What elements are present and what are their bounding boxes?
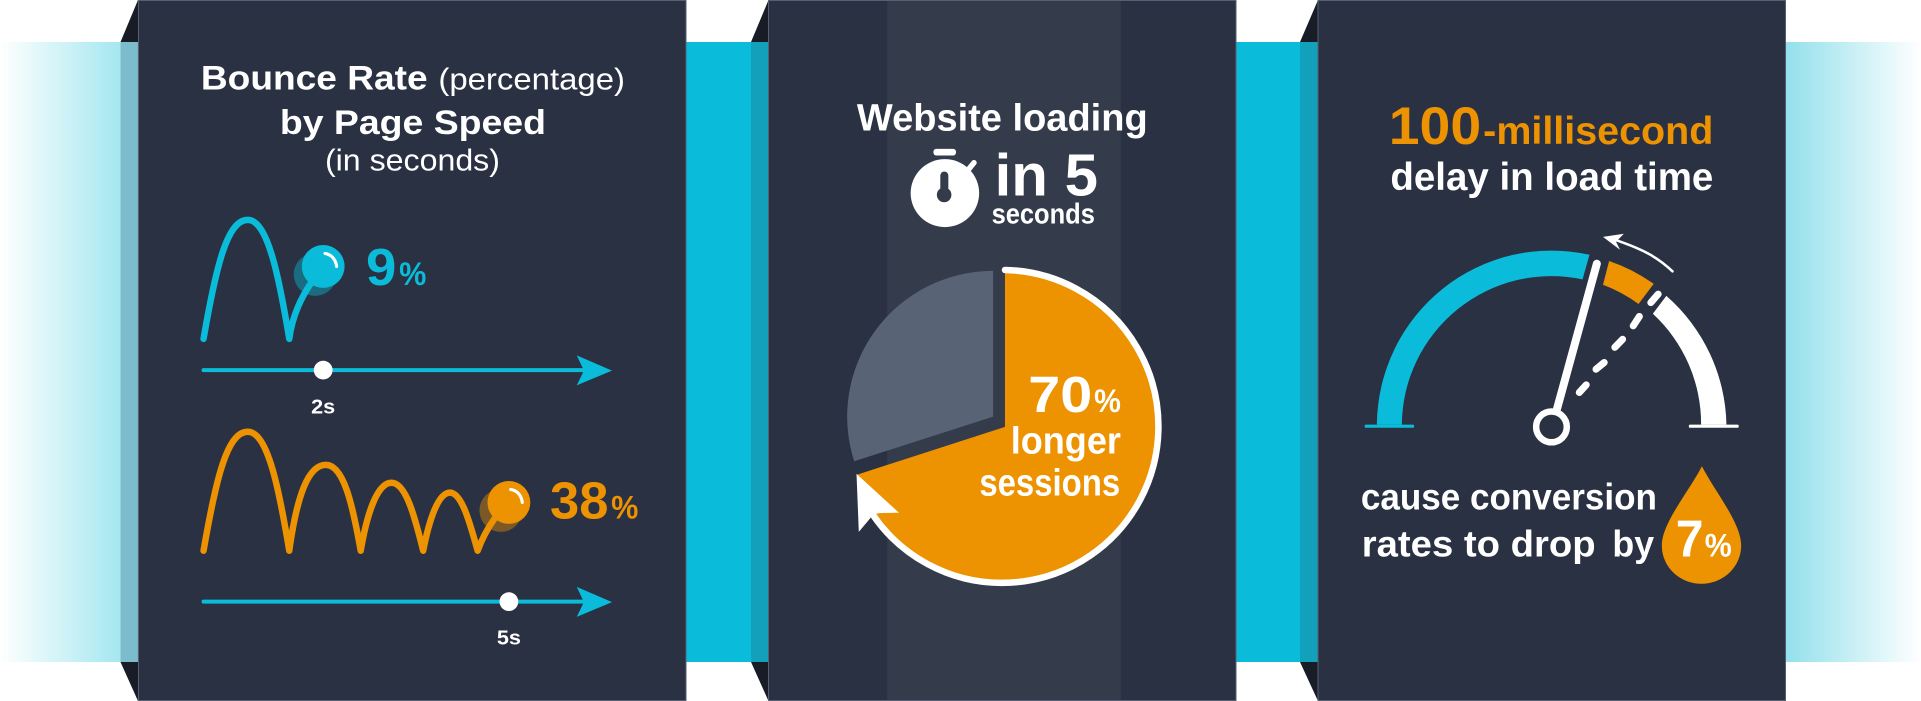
icon: drop with 7%: % (1705, 527, 1732, 564)
ribbon folds (120, 0, 1318, 701)
text: conversion drop: by (1612, 524, 1655, 565)
heading: bounce rate: (in seconds) (325, 145, 500, 178)
axis: 5s: 5s (497, 628, 521, 650)
axis: 2s (204, 355, 612, 418)
heading: website loading: Website loading (857, 97, 1148, 139)
heading: 100-millisecond delay: -millisecond (1483, 108, 1713, 152)
pie label (979, 367, 1121, 504)
heading: 100-millisecond delay (1389, 96, 1713, 198)
panel: website loading (768, 0, 1236, 701)
value: 38%: % (611, 490, 638, 526)
value: 38%: 38 (550, 471, 608, 530)
heading: bounce rate: (percentage) (438, 63, 625, 96)
in 5 seconds: in 5 (995, 142, 1098, 208)
heading: 100-millisecond delay: delay in load time (1390, 154, 1713, 198)
pie label: sessions (979, 462, 1120, 504)
value: 38% (550, 471, 638, 530)
pie label: % (1094, 384, 1121, 420)
text: conversion drop: rates to drop (1362, 524, 1596, 565)
icon: drop with 7%: 7 (1676, 510, 1704, 568)
icon: cursor arrow (857, 474, 899, 532)
in 5 seconds: seconds (992, 198, 1095, 230)
gauge (1365, 234, 1739, 442)
panel: load delay (1318, 0, 1786, 701)
heading: bounce rate: Bounce Rate (201, 59, 428, 97)
value: 9%: % (399, 256, 426, 292)
axis: 2s: 2s (311, 396, 335, 418)
needle (1556, 264, 1597, 411)
value: 9% (366, 238, 426, 296)
arrow: needle movement (1603, 234, 1672, 271)
pie chart: 70% longer sessions (847, 270, 1160, 583)
text: conversion drop (1361, 477, 1657, 565)
heading: bounce rate: by Page Speed (280, 104, 546, 142)
in 5 seconds (992, 142, 1098, 230)
chart: 2 second bounce (204, 220, 345, 339)
icon: drop with 7% (1662, 466, 1741, 584)
text: conversion drop: cause conversion (1361, 477, 1657, 518)
chart: 5 second bounce (204, 432, 530, 551)
icon: stopwatch (911, 149, 979, 227)
value: 9%: 9 (366, 238, 396, 296)
axis: 5s (204, 587, 612, 650)
pie label: 70 (1028, 367, 1092, 424)
needle dashed previous position (1579, 294, 1658, 392)
panel: bounce rate (138, 0, 686, 701)
heading: bounce rate (201, 59, 625, 178)
needle hub (1536, 411, 1567, 442)
pie label: longer (1011, 420, 1121, 462)
heading: 100-millisecond delay: 100 (1389, 96, 1481, 155)
